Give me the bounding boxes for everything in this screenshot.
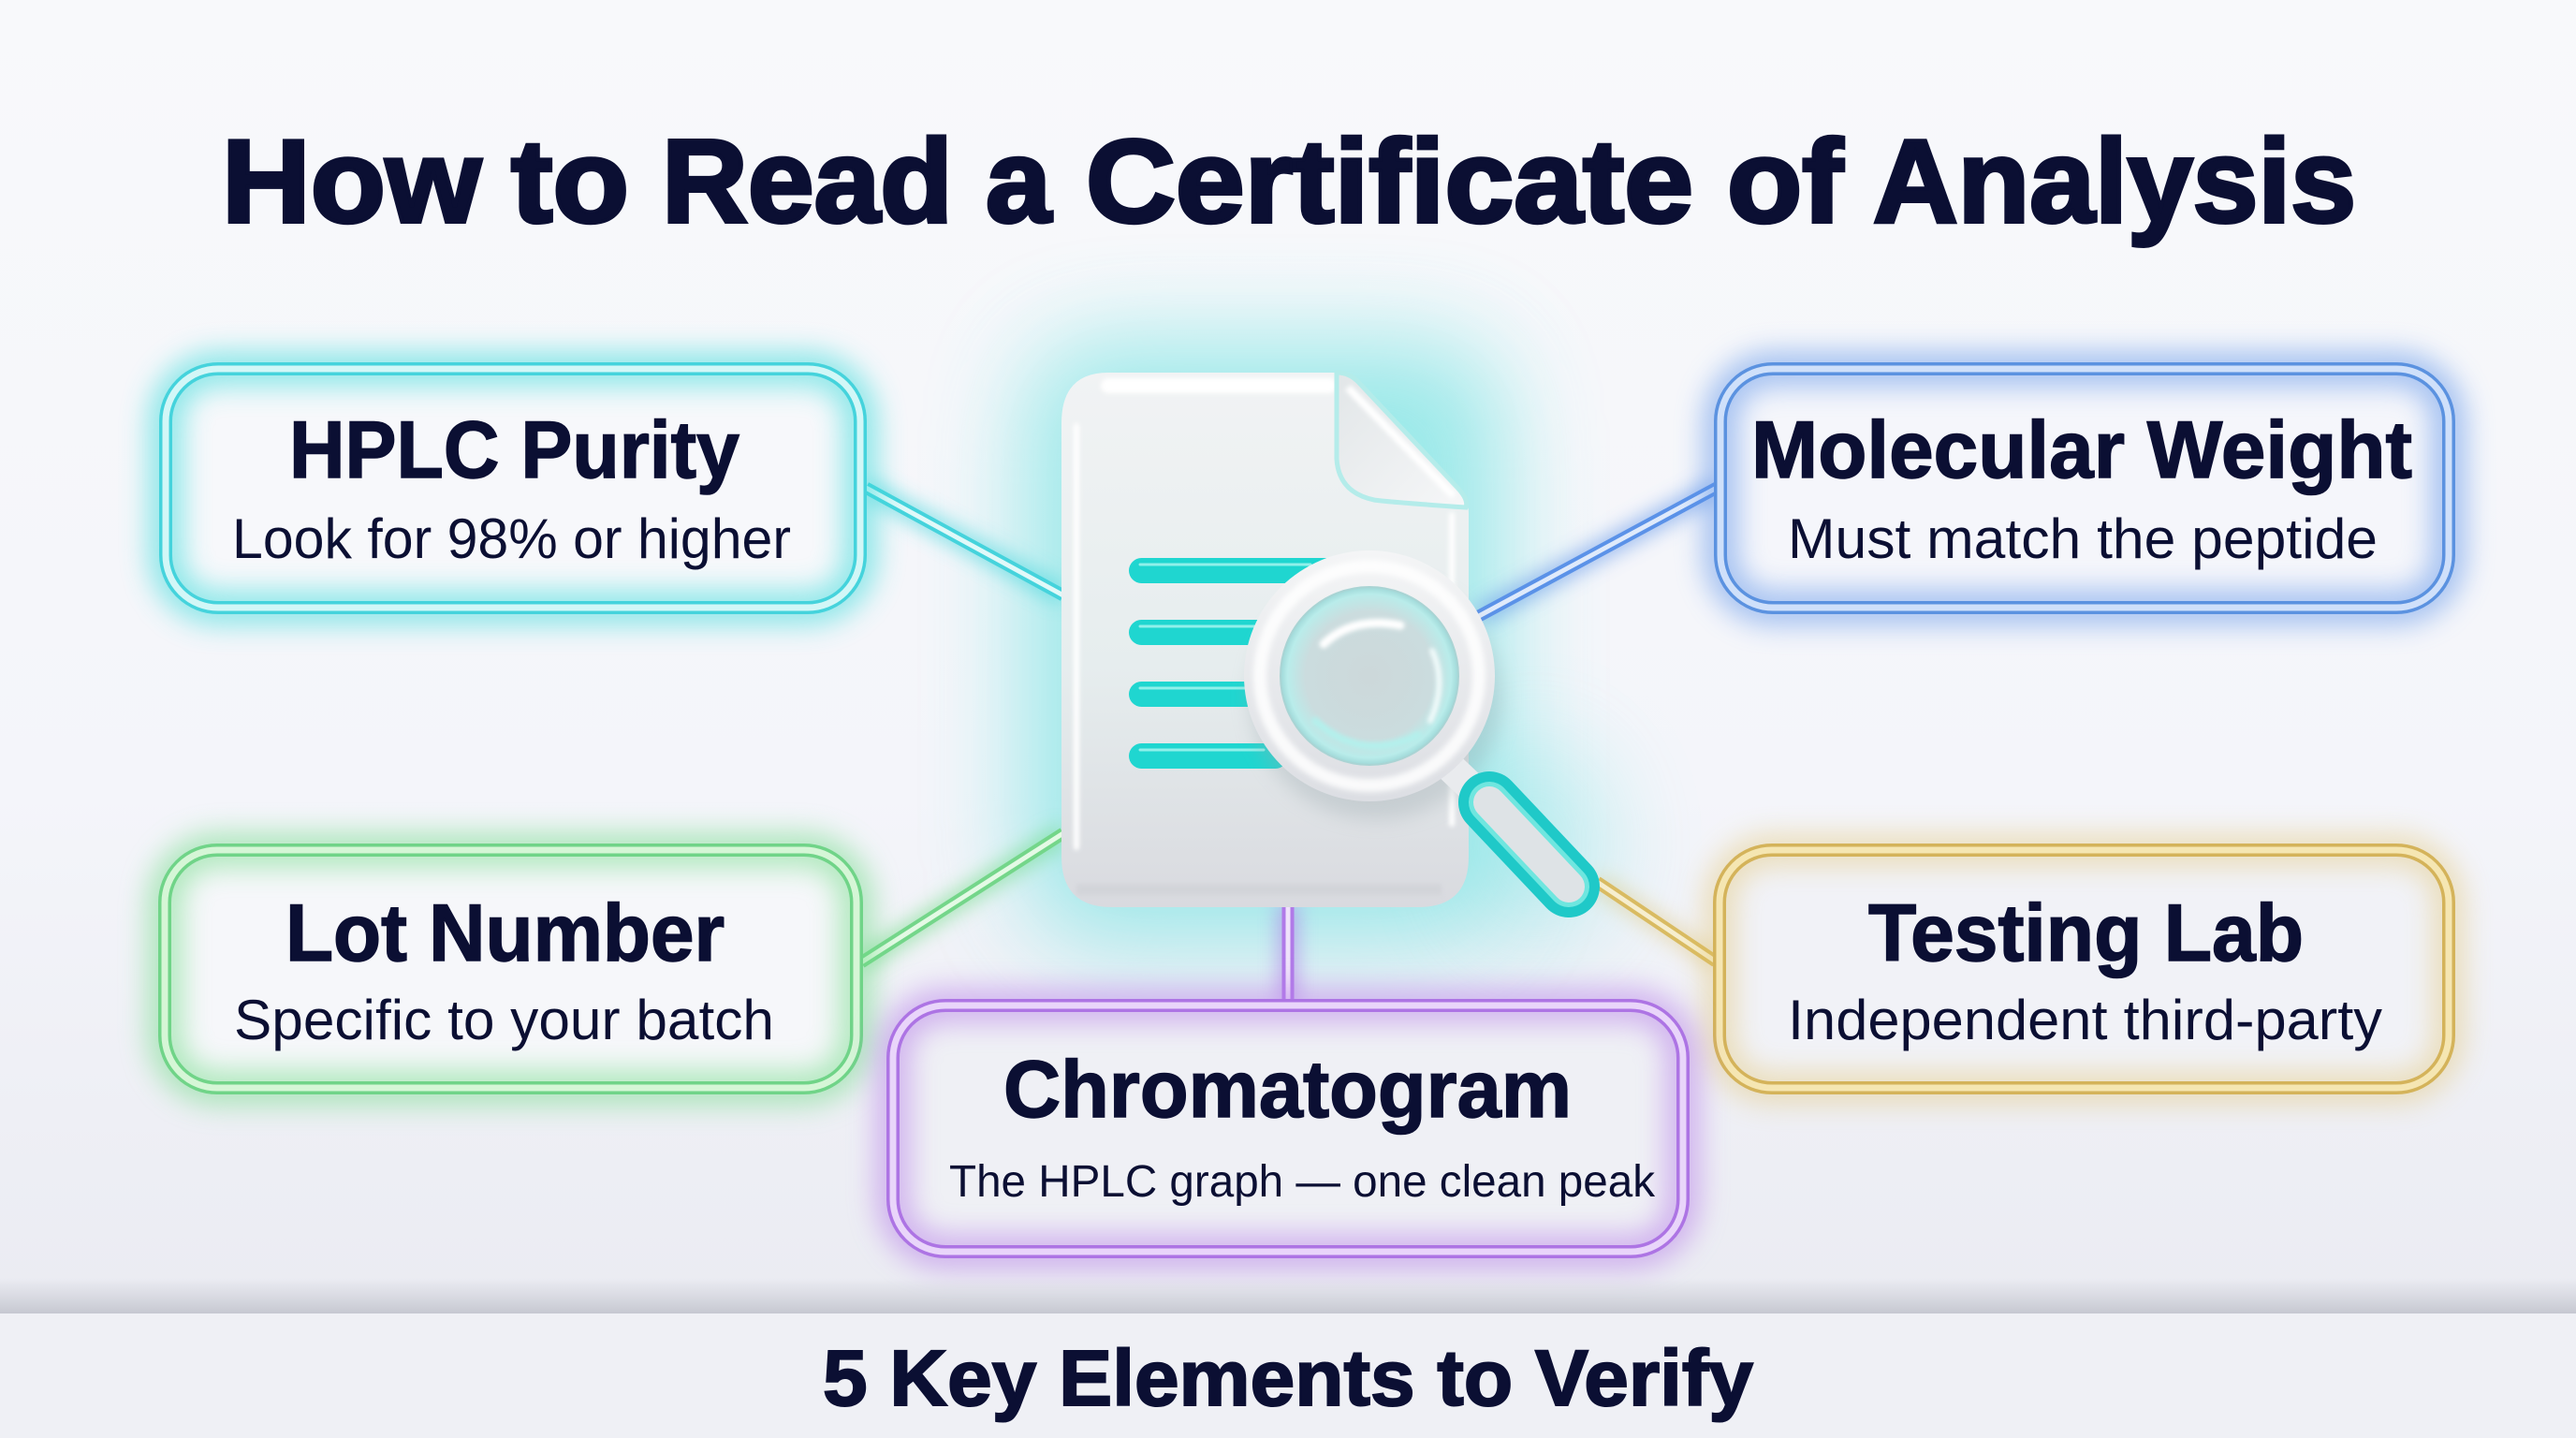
icon: magnifier lens [1281, 587, 1458, 765]
connector: HPLC Purity [866, 488, 1063, 595]
connector: Molecular Weight [1479, 488, 1717, 616]
text: HPLC Purity detail: Look for 98% or higher [232, 507, 791, 570]
central glow [1025, 342, 1610, 946]
panel: Lot Number [159, 844, 862, 1093]
footer band [0, 1313, 2576, 1438]
connector: Chromatogram [1280, 903, 1296, 1004]
title: of [1727, 115, 1844, 247]
icon: document [1061, 373, 1469, 907]
icon: magnifying glass [1244, 550, 1569, 887]
heading: Lot Number: Lot Number [285, 888, 724, 978]
title: How [222, 115, 482, 247]
title [222, 115, 2356, 247]
icon: text lines [1129, 558, 1382, 769]
icon: magnifier neck [1451, 768, 1490, 805]
title: Certificate [1086, 115, 1693, 247]
text: Chromatogram detail: The HPLC graph — one clean peak [949, 1157, 1656, 1207]
title: Analysis [1873, 115, 2356, 247]
connector: Testing Lab [1597, 882, 1716, 961]
connector: Lot Number [861, 833, 1063, 962]
footer text: 5 Key Elements to Verify [823, 1334, 1753, 1422]
title: Read [662, 115, 953, 247]
panel: Chromatogram [887, 1000, 1689, 1257]
icon: magnifier handle [1489, 802, 1569, 887]
heading: Testing Lab: Testing Lab [1868, 888, 2304, 978]
panel: Molecular Weight [1715, 363, 2454, 613]
heading: Chromatogram: Chromatogram [1003, 1045, 1572, 1135]
panel: Testing Lab [1714, 844, 2454, 1093]
panel: HPLC Purity [160, 363, 866, 613]
heading: Molecular Weight: Molecular Weight [1751, 405, 2412, 495]
text: Testing Lab detail: Independent third-party [1788, 989, 2382, 1051]
title: to [511, 115, 629, 247]
heading: HPLC Purity: HPLC Purity [289, 405, 739, 495]
text: Lot Number detail: Specific to your batch [234, 989, 774, 1051]
text: Molecular Weight detail: Must match the peptide [1788, 507, 2378, 570]
title: a [986, 115, 1052, 247]
icon: magnifier ring [1244, 550, 1495, 801]
icon: folded corner [1337, 373, 1467, 507]
shadow above footer band [0, 1278, 2576, 1313]
